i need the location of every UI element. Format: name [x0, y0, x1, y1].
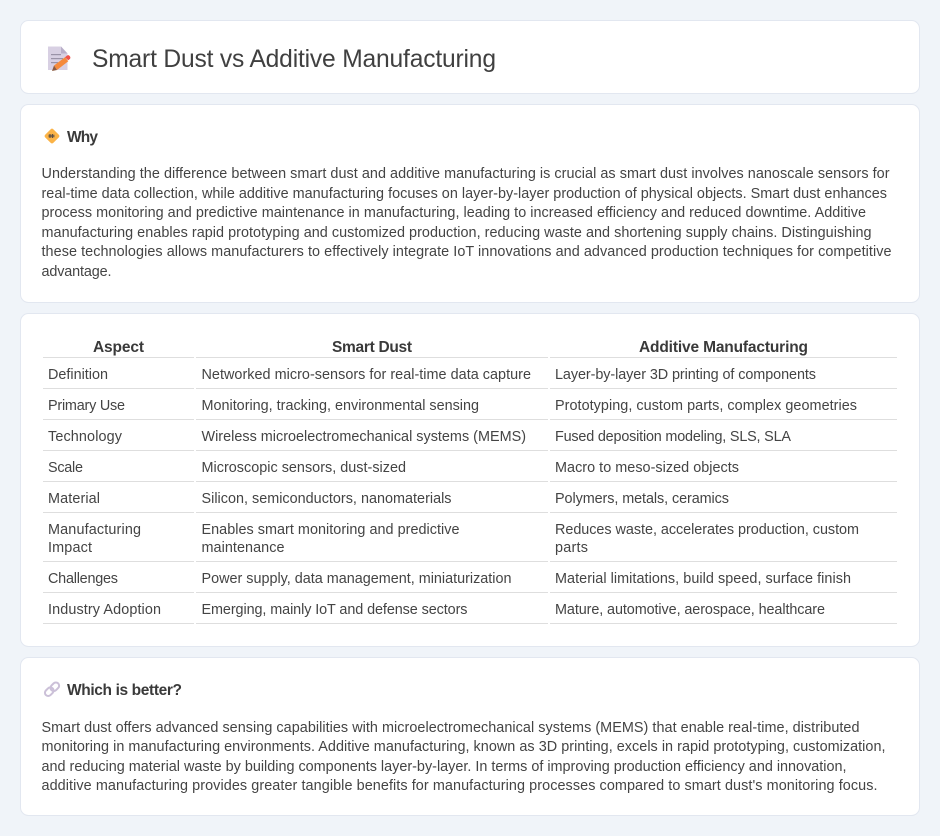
- table header row: Aspect: [93, 339, 144, 356]
- row: primary use: Prototyping, custom parts, complex geometries: [555, 398, 857, 414]
- text block: why explanation: Understanding the difference between smart dust and additive manufacturing is crucial as smart dust involves nanoscale sensors for: [42, 166, 890, 182]
- panel: title header: [20, 20, 920, 94]
- row: manufacturing impact: Manufacturing: [48, 522, 141, 538]
- panel: comparison table: [20, 314, 920, 646]
- row: technology: Technology: [48, 429, 123, 445]
- title: Smart Dust vs Additive Manufacturing: [92, 46, 496, 73]
- row: manufacturing impact: parts: [555, 540, 588, 556]
- row: material: Polymers, metals, ceramics: [555, 491, 729, 507]
- row: manufacturing impact: maintenance: [202, 540, 284, 556]
- text block: verdict: and reducing material waste by building components layer-by-layer. In terms of improving production efficiency and innovation,: [42, 759, 846, 775]
- heading: why: Why: [67, 129, 98, 146]
- text block: why explanation: process monitoring and predictive maintenance in manufacturing, leading to increased efficiency and reduced downtime. Additive: [42, 205, 866, 221]
- panel: which is better: [20, 658, 920, 816]
- text block: why explanation: real-time data collection, while additive manufacturing focuses on layer-by-layer production of physical objects. Smart dust enhances: [42, 186, 887, 202]
- text block: verdict: Smart dust offers advanced sensing capabilities with microelectromechanical systems (MEMS) that enable real-time, distributed: [42, 720, 860, 736]
- panel: why: [20, 104, 920, 302]
- row: technology: Fused deposition modeling, SLS, SLA: [555, 429, 791, 445]
- row: challenges: Material limitations, build speed, surface finish: [555, 571, 851, 587]
- row: industry adoption: Mature, automotive, aerospace, healthcare: [555, 602, 825, 618]
- row: scale: Microscopic sensors, dust-sized: [202, 460, 406, 476]
- row: primary use: Primary Use: [48, 398, 125, 414]
- row: scale: Scale: [48, 460, 83, 476]
- icon: chain link: [44, 681, 60, 697]
- text block: verdict: [42, 720, 886, 794]
- row: manufacturing impact: [43, 522, 897, 562]
- row: material: [43, 491, 897, 513]
- icon: orange diamond sign: [44, 128, 60, 144]
- text block: why explanation: these technologies allows manufacturers to effectively integrate IoT innovations and advanced production techniques for competitive: [42, 244, 892, 260]
- row: primary use: Monitoring, tracking, environmental sensing: [202, 398, 479, 414]
- row: industry adoption: [43, 602, 897, 624]
- row: material: Silicon, semiconductors, nanomaterials: [202, 491, 452, 507]
- row: primary use: [43, 398, 897, 420]
- row: industry adoption: Emerging, mainly IoT and defense sectors: [202, 602, 468, 618]
- row: definition: [43, 367, 897, 389]
- icon: document with pencil: [48, 46, 70, 71]
- row: definition: Definition: [48, 367, 108, 383]
- text block: why explanation: [42, 166, 892, 280]
- text block: why explanation: advantage.: [42, 264, 112, 280]
- table header row: Smart Dust: [332, 339, 412, 356]
- text block: verdict: monitoring in manufacturing environments. Additive manufacturing, known as 3D printing, excels in rapid prototyping, customization,: [42, 739, 886, 755]
- row: definition: Networked micro-sensors for real-time data capture: [202, 367, 531, 383]
- row: industry adoption: Industry Adoption: [48, 602, 161, 618]
- table header row: [43, 339, 897, 358]
- row: challenges: Challenges: [48, 571, 118, 587]
- row: scale: [43, 460, 897, 482]
- row: challenges: Power supply, data management, miniaturization: [202, 571, 512, 587]
- table header row: Additive Manufacturing: [639, 339, 808, 356]
- text block: verdict: additive manufacturing provides greater tangible benefits for manufacturing processes compared to smart dust's monitoring focus.: [42, 778, 878, 794]
- row: technology: [43, 429, 897, 451]
- row: scale: Macro to meso-sized objects: [555, 460, 739, 476]
- row: definition: Layer-by-layer 3D printing of components: [555, 367, 816, 383]
- row: material: Material: [48, 491, 100, 507]
- row: technology: Wireless microelectromechanical systems (MEMS): [202, 429, 526, 445]
- row: manufacturing impact: Reduces waste, accelerates production, custom: [555, 522, 859, 538]
- row: challenges: [43, 571, 897, 593]
- heading: which is better: Which is better?: [67, 682, 182, 699]
- row: manufacturing impact: Impact: [48, 540, 92, 556]
- row: manufacturing impact: Enables smart monitoring and predictive: [202, 522, 460, 538]
- text block: why explanation: manufacturing enables rapid prototyping and customized production, reducing waste and shortening supply chains. Distinguishing: [42, 225, 872, 241]
